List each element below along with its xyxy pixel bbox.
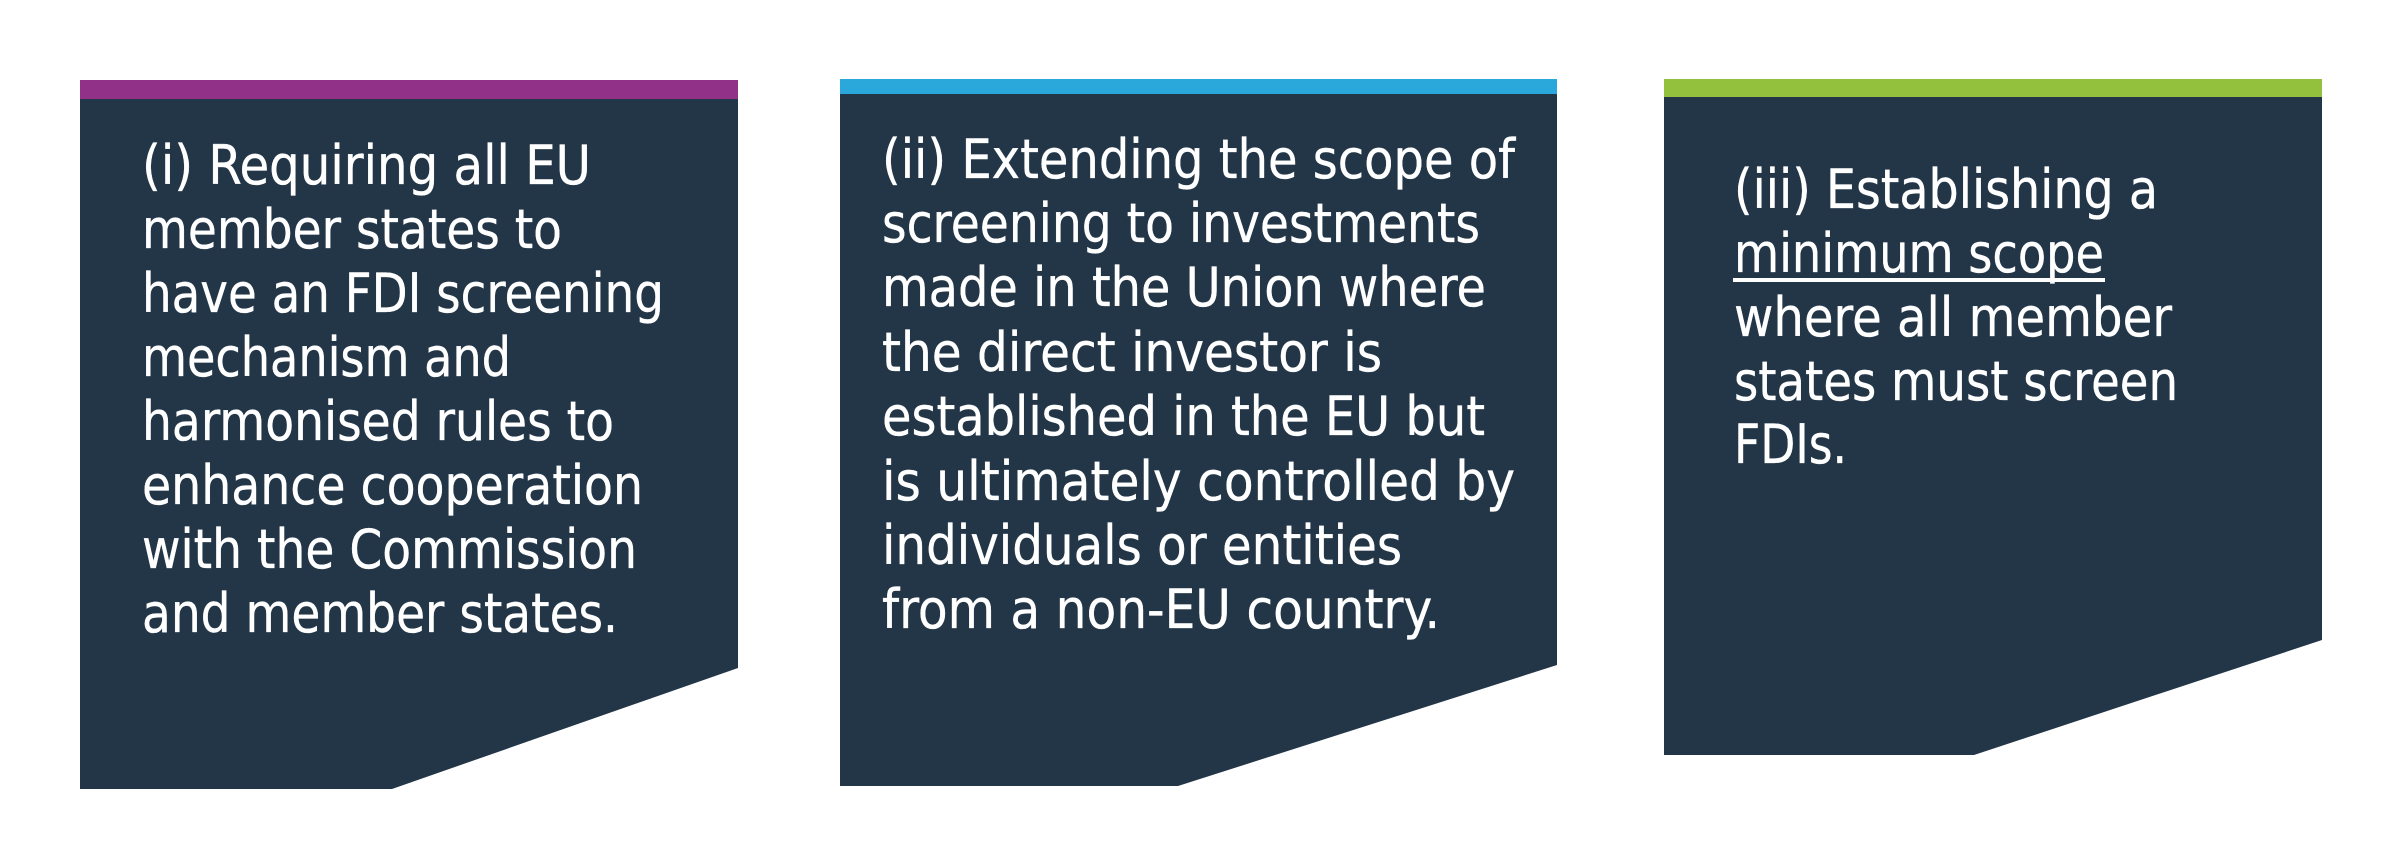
purple accent bar xyxy=(80,80,738,99)
text block: requirement i: (i) Requiring all EU xyxy=(142,134,591,197)
panel: (i) requiring all member states xyxy=(80,80,738,789)
text block: requirement ii: made in the Union where xyxy=(882,256,1486,319)
text block: requirement i: with the Commission xyxy=(142,518,637,581)
text block: requirement iii: where all member xyxy=(1734,286,2172,349)
text block: requirement i: and member states. xyxy=(142,582,618,645)
text block: requirement i: enhance cooperation xyxy=(142,454,643,517)
card background xyxy=(840,79,1557,786)
text block: requirement ii: established in the EU but xyxy=(882,385,1485,448)
text block: requirement i: member states to xyxy=(142,198,562,261)
text block: requirement iii xyxy=(1733,158,2178,476)
card background xyxy=(80,80,738,789)
text block: requirement i xyxy=(142,134,664,645)
card background xyxy=(1664,79,2322,755)
text block: requirement ii: is ultimately controlled by xyxy=(882,450,1515,513)
text block: requirement iii: minimum scope xyxy=(1734,222,2104,285)
panel: (iii) establishing a minimum scope xyxy=(1664,79,2322,755)
green accent bar xyxy=(1664,79,2322,97)
text block: requirement ii xyxy=(882,128,1517,641)
text block: requirement i: have an FDI screening xyxy=(142,262,664,325)
text block: requirement iii: (iii) Establishing a xyxy=(1734,158,2158,221)
text block: requirement ii: screening to investments xyxy=(882,192,1480,255)
text block: requirement i: mechanism and xyxy=(142,326,511,389)
text block: requirement ii: (ii) Extending the scope of xyxy=(882,128,1517,191)
text block: requirement iii: states must screen xyxy=(1734,350,2178,413)
blue accent bar xyxy=(840,79,1557,94)
text block: requirement i: harmonised rules to xyxy=(142,390,614,453)
text block: requirement ii: individuals or entities xyxy=(882,514,1402,577)
panel: (ii) extending the scope xyxy=(840,79,1557,786)
text block: requirement ii: the direct investor is xyxy=(882,321,1382,384)
text block: requirement ii: from a non-EU country. xyxy=(882,578,1440,641)
text block: requirement iii: FDIs. xyxy=(1734,413,1847,476)
